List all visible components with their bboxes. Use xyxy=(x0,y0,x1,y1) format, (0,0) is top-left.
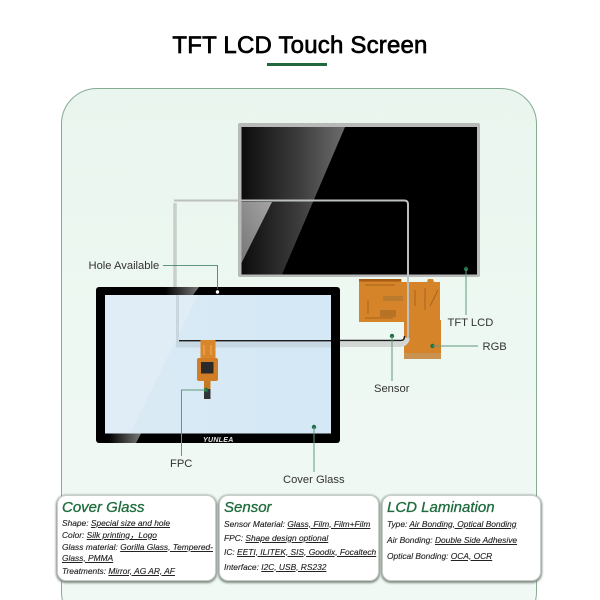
title: TFT LCD Touch Screen xyxy=(172,32,428,59)
brand text: YUNLEA xyxy=(203,437,234,444)
callout: Cover Glass xyxy=(283,425,345,486)
card heading: Sensor xyxy=(224,499,272,516)
panel: Sensor card xyxy=(219,495,379,581)
panel: background xyxy=(61,88,537,600)
spec list xyxy=(62,518,213,576)
panel: Cover Glass card: Color: Silk printing，Logo xyxy=(62,530,157,540)
callout: Hole Available xyxy=(88,260,218,289)
TFT LCD panel xyxy=(238,123,480,277)
callout: Sensor xyxy=(374,334,410,395)
panel: Sensor card: IC: EETI, ILITEK, SIS, Goodix, Focaltech xyxy=(224,546,376,556)
card heading: LCD Lamination xyxy=(387,499,495,516)
callout: FPC: FPC xyxy=(170,458,192,470)
Cover glass FPC with chip xyxy=(197,340,218,399)
panel: Sensor card: FPC: Shape design optional xyxy=(224,532,328,542)
panel: LCD Lamination card xyxy=(382,495,541,581)
callout: TFT LCD: TFT LCD xyxy=(448,317,493,329)
panel: Sensor card: Interface: I2C, USB, RS232 xyxy=(224,562,326,572)
callout: Cover Glass: Cover Glass xyxy=(283,474,345,486)
panel: LCD Lamination card: Optical Bonding: OCA, OCR xyxy=(387,550,492,560)
panel: Cover Glass card: Glass, PMMA xyxy=(62,552,113,562)
panel: LCD Lamination card: Type: Air Bonding, Optical Bonding xyxy=(387,518,516,528)
Sensor frame xyxy=(173,200,408,347)
callout: RGB: RGB xyxy=(482,341,507,353)
callout: RGB xyxy=(430,341,507,353)
callout: TFT LCD xyxy=(448,267,493,329)
callout: Sensor: Sensor xyxy=(374,383,410,395)
spec list xyxy=(224,518,376,572)
callout: Hole Available: Hole Available xyxy=(88,260,159,272)
panel: Cover Glass card: Treatments: Mirror, AG AR, AF xyxy=(62,566,175,576)
title underline xyxy=(267,63,327,66)
spec list xyxy=(386,518,518,561)
panel: Cover Glass card xyxy=(57,495,216,581)
Cover glass xyxy=(96,287,340,444)
panel: Cover Glass card: Shape: Special size and hole xyxy=(62,518,170,528)
card heading: Cover Glass xyxy=(62,499,145,516)
FPC: LCD flex cable xyxy=(359,279,441,359)
panel: Sensor card: Sensor Material: Glass, Film, Film+Film xyxy=(224,518,370,528)
Sensor frame edge seen through cover glass xyxy=(176,295,331,348)
callout: FPC xyxy=(170,388,208,470)
panel: Cover Glass card: Glass material: Gorilla Glass, Tempered- xyxy=(62,542,213,552)
panel: LCD Lamination card: Air Bonding: Double Side Adhesive xyxy=(387,534,517,544)
